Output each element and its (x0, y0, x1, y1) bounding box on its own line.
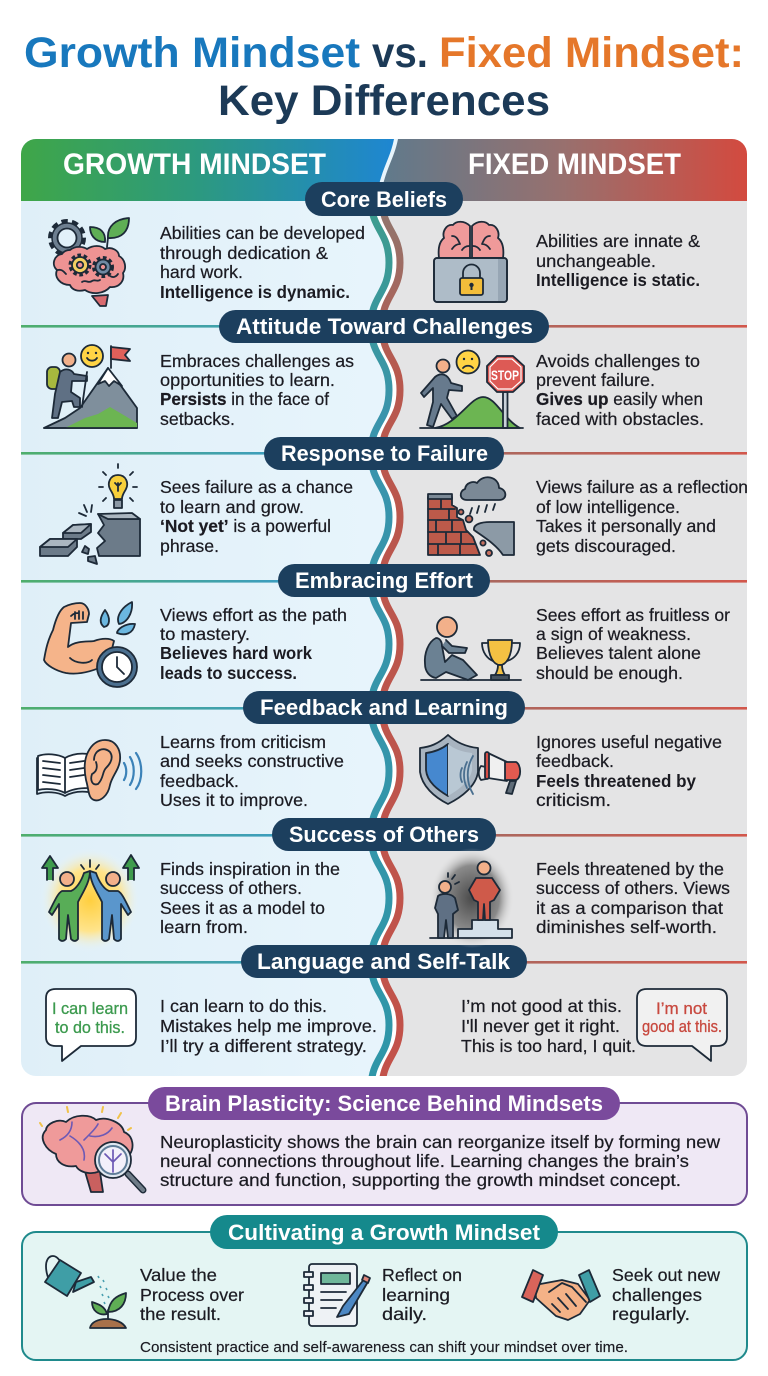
text: feedback fixed: Feels threatened by (536, 771, 696, 791)
heading pill: attitude toward challenges (219, 310, 549, 343)
text: challenges growth: Persists in the face of (160, 389, 329, 409)
text: core beliefs fixed: unchangeable. (536, 251, 656, 271)
text: feedback growth: Learns from criticism (160, 732, 326, 752)
icon: person avoiding hill with stop sign (420, 350, 524, 428)
icon: shield and megaphone (420, 735, 520, 804)
text: effort fixed: a sign of weakness. (536, 624, 691, 644)
heading pill: success of others (272, 818, 496, 851)
text: self-talk fixed: I'll never get it right. (461, 1016, 620, 1036)
text: others growth: Finds inspiration in the (160, 859, 340, 879)
icon: watering can and seedling (45, 1256, 126, 1328)
icon: open book and ear (37, 740, 141, 800)
heading pill: response to failure (264, 437, 504, 470)
text: effort fixed: Believes talent alone (536, 643, 701, 663)
heading pill: embracing effort: Embracing Effort (295, 568, 473, 593)
text: failure fixed: Takes it personally and (536, 516, 716, 536)
text: seek out new challenges: Seek out new (612, 1265, 720, 1285)
text: reflect on learning: Reflect on (382, 1265, 462, 1285)
heading pill: attitude toward challenges: Attitude Toward Challenges (236, 314, 533, 339)
text: failure growth: ‘Not yet’ is a powerful (160, 516, 331, 536)
text: effort growth: Views effort as the path (160, 605, 347, 625)
text: self-talk fixed: This is too hard, I quit. (461, 1036, 636, 1056)
title: vs. (372, 29, 428, 77)
text: others growth (160, 859, 340, 937)
icon: broken block and light bulb (40, 464, 140, 564)
text: feedback growth (160, 732, 344, 810)
text: core beliefs growth: hard work. (160, 262, 243, 282)
icon: crumbling brick wall under rain cloud (428, 477, 514, 556)
growth column header (21, 139, 394, 201)
text: neuroplasticity: structure and function, supporting the growth mindset concept. (160, 1170, 681, 1190)
icon: dejected person with trophy (421, 617, 521, 680)
text: core beliefs fixed: Intelligence is static. (536, 270, 700, 290)
header label: fixed mindset: FIXED MINDSET (468, 148, 681, 181)
heading pill: embracing effort (278, 564, 490, 597)
icon: hiker climbing mountain (44, 345, 137, 428)
heading pill: cultivating (210, 1215, 558, 1249)
text: failure fixed: of low intelligence. (536, 497, 680, 517)
text: feedback fixed: criticism. (536, 790, 611, 810)
text: failure fixed (536, 477, 748, 556)
text: core beliefs growth: Abilities can be developed (160, 223, 365, 243)
text: failure growth: phrase. (160, 536, 219, 556)
text: self-talk growth: I can learn to do this. (160, 996, 327, 1016)
text: failure fixed: gets discouraged. (536, 536, 676, 556)
text: neuroplasticity: neural connections throughout life. Learning changes the brain’s (160, 1151, 689, 1171)
text: challenges growth: opportunities to learn. (160, 370, 335, 390)
text: failure fixed: Views failure as a reflection (536, 477, 748, 497)
text: effort fixed: Sees effort as fruitless or (536, 605, 730, 625)
text: feedback growth: Uses it to improve. (160, 790, 308, 810)
text: effort growth: leads to success. (160, 663, 297, 683)
title: Growth Mindset (24, 29, 360, 77)
icon: brain with magnifying glass (40, 1107, 143, 1192)
icon: locked brain (434, 222, 507, 302)
text: challenges growth (160, 351, 354, 429)
header label: growth mindset: GROWTH MINDSET (63, 148, 326, 181)
text: seek out new challenges: challenges (612, 1285, 702, 1305)
icon: brain with gears and sprout (51, 218, 129, 306)
text: feedback fixed: feedback. (536, 751, 614, 771)
text: others fixed: it as a comparison that (536, 898, 723, 918)
text: self-talk growth (160, 996, 377, 1056)
text: feedback growth: feedback. (160, 771, 239, 791)
icon: handshake (522, 1270, 600, 1320)
panel: cultivating a growth mindset (22, 1215, 747, 1360)
text: reflect on learning: daily. (382, 1304, 427, 1324)
text: reflect on learning: learning (382, 1285, 450, 1305)
text: value the process (140, 1265, 244, 1324)
heading pill: language and self-talk: Language and Self-Talk (257, 949, 510, 974)
speech bubble: fixed: good at this. (642, 1017, 722, 1036)
text: core beliefs growth (160, 223, 365, 302)
title (24, 29, 744, 125)
heading pill: core beliefs: Core Beliefs (321, 187, 447, 212)
text: self-talk fixed: I’m not good at this. (461, 996, 622, 1016)
heading pill: feedback and learning: Feedback and Learning (260, 695, 508, 720)
text: effort growth: to mastery. (160, 624, 250, 644)
text: others fixed: success of others. Views (536, 878, 730, 898)
text: core beliefs fixed (536, 231, 700, 290)
text: seek out new challenges: regularly. (612, 1304, 690, 1324)
icon: high five with arrows (40, 848, 140, 952)
title: Fixed Mindset: (439, 29, 744, 77)
speech bubble: growth: to do this. (55, 1018, 125, 1037)
text: challenges fixed: faced with obstacles. (536, 409, 704, 429)
text: failure growth: Sees failure as a chance (160, 477, 353, 497)
text: others growth: success of others. (160, 878, 302, 898)
panel: brain plasticity (22, 1087, 747, 1205)
comparison panel (21, 139, 747, 1089)
text: others growth: learn from. (160, 917, 248, 937)
heading pill: success of others: Success of Others (289, 822, 479, 847)
fixed column header (380, 139, 747, 201)
text: effort fixed: should be enough. (536, 663, 683, 683)
text: challenges fixed (536, 351, 704, 429)
heading pill: language and self-talk (241, 945, 527, 978)
icon: comparison on podium (430, 848, 514, 948)
text: others fixed: Feels threatened by the (536, 859, 724, 879)
text: others fixed (536, 859, 730, 937)
speech bubble: growth: I can learn (52, 999, 128, 1018)
speech bubble: fixed: I’m not (656, 999, 707, 1018)
text: neuroplasticity: Neuroplasticity shows the brain can reorganize itself by forming new (160, 1132, 720, 1152)
speech bubble: fixed (637, 989, 727, 1061)
text: neuroplasticity (160, 1132, 720, 1190)
heading pill: core beliefs (305, 182, 463, 216)
center wave divider (371, 199, 400, 1089)
text: challenges fixed: prevent failure. (536, 370, 655, 390)
text: challenges fixed: Gives up easily when (536, 389, 703, 409)
text: failure growth (160, 477, 353, 556)
text: core beliefs fixed: Abilities are innate & (536, 231, 700, 251)
text: challenges fixed: Avoids challenges to (536, 351, 700, 371)
text: core beliefs growth: Intelligence is dynamic. (160, 282, 350, 302)
text: seek out new challenges (612, 1265, 720, 1324)
title: Key Differences (218, 77, 550, 125)
text: value the process: Value the (140, 1265, 217, 1285)
text: failure growth: to learn and grow. (160, 497, 304, 517)
text: effort fixed (536, 605, 730, 683)
icon: flexed arm with clock and sweat (44, 602, 137, 687)
text: self-talk growth: Mistakes help me improve. (160, 1016, 377, 1036)
heading pill: brain plasticity: Brain Plasticity: Science Behind Mindsets (165, 1091, 603, 1116)
text: challenges growth: setbacks. (160, 409, 235, 429)
heading pill: cultivating: Cultivating a Growth Mindset (228, 1220, 540, 1245)
speech bubble: growth (46, 989, 136, 1061)
icon: notebook and pen (304, 1264, 370, 1326)
heading pill: feedback and learning (243, 691, 525, 724)
text: feedback fixed (536, 732, 722, 810)
heading pill: response to failure: Response to Failure (281, 441, 488, 466)
text: others growth: Sees it as a model to (160, 898, 325, 918)
text: reflect on learning (382, 1265, 462, 1324)
text: feedback fixed: Ignores useful negative (536, 732, 722, 752)
text: feedback growth: and seeks constructive (160, 751, 344, 771)
text: closing note: Consistent practice and self-awareness can shift your mindset over time. (140, 1339, 628, 1356)
text: others fixed: diminishes self-worth. (536, 917, 717, 937)
text: effort growth (160, 605, 347, 683)
text: value the process: the result. (140, 1304, 221, 1324)
text: self-talk growth: I’ll try a different strategy. (160, 1036, 367, 1056)
text: core beliefs growth: through dedication & (160, 243, 328, 263)
text: challenges growth: Embraces challenges as (160, 351, 354, 371)
icon: person avoiding hill with stop sign: STOP (491, 367, 519, 383)
text: self-talk fixed (461, 996, 636, 1056)
text: effort growth: Believes hard work (160, 643, 312, 663)
text: value the process: Process over (140, 1285, 244, 1305)
